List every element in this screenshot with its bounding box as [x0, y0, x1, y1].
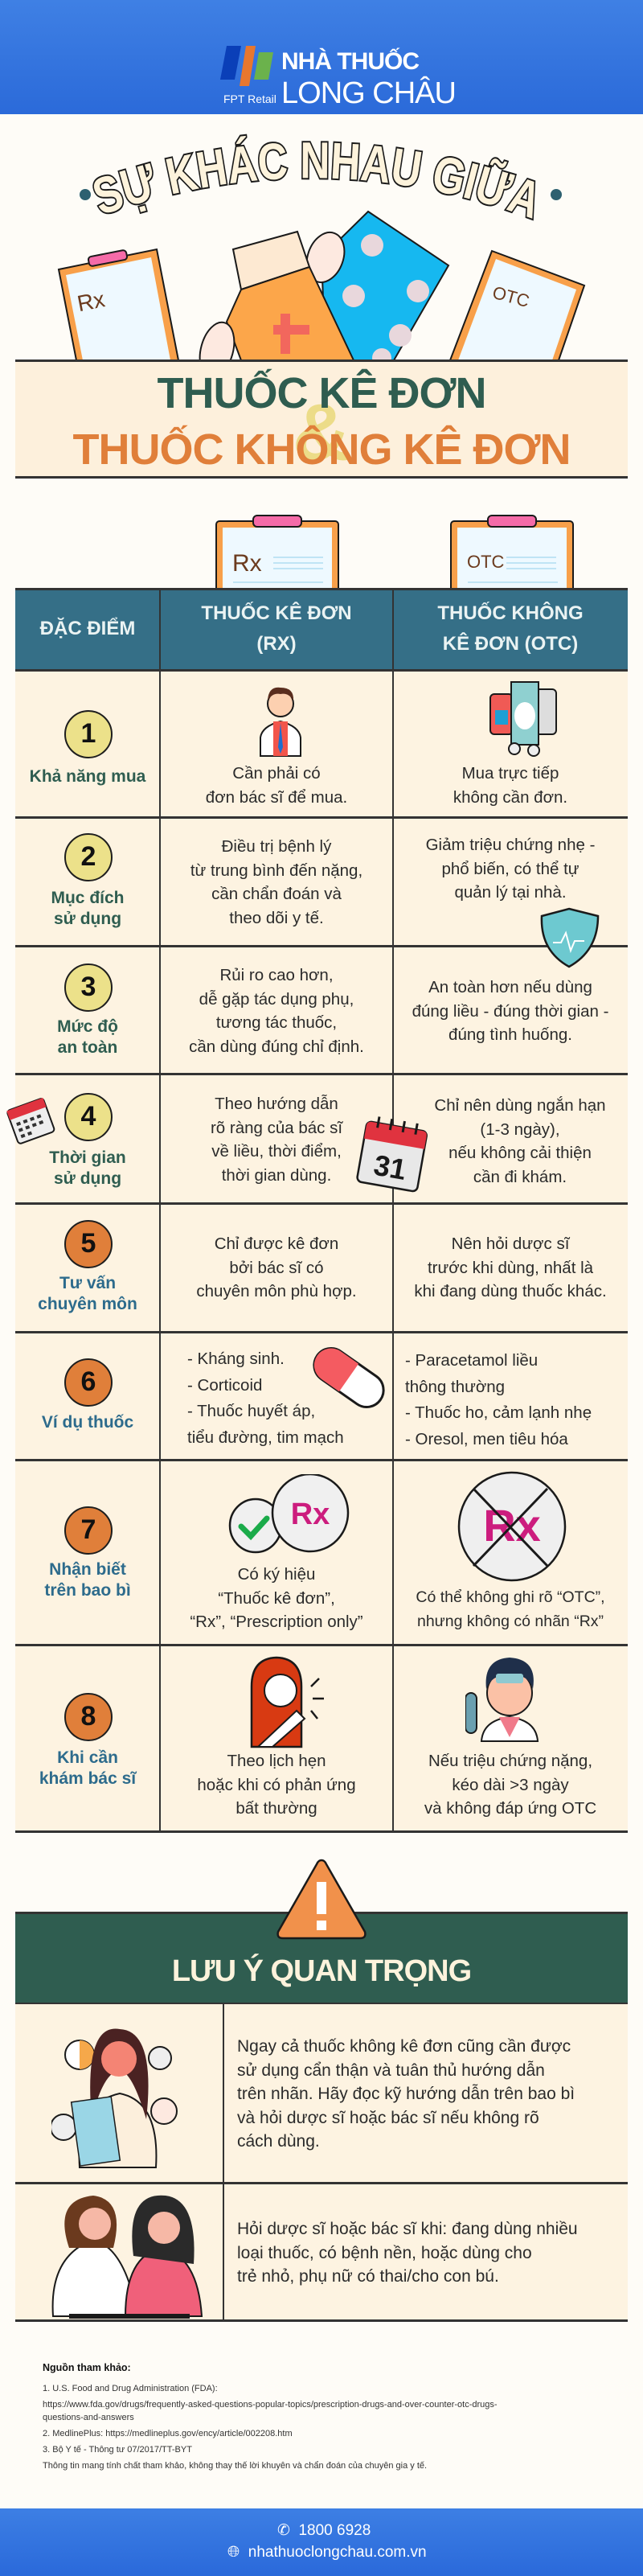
icon: capsule [313, 1347, 385, 1408]
row 4: thời gian dùng. [222, 1166, 331, 1184]
icon: coughing person [251, 1657, 324, 1748]
row 6: 6 [81, 1366, 96, 1397]
row 4: rõ ràng của bác sĩ [211, 1118, 342, 1137]
illustration: meds and clipboards [58, 211, 585, 359]
icon: pharmacist [51, 2028, 178, 2168]
row 3: Rủi ro cao hơn, [219, 966, 334, 984]
row 2: 2 [81, 841, 96, 872]
references: Nguồn tham khảo: [43, 2362, 131, 2373]
table header: THUỐC KHÔNG [437, 602, 584, 624]
row 7 [44, 1472, 605, 1631]
logo: LONG CHÂU [281, 76, 456, 110]
note 1: Ngay cả thuốc không kê đơn cũng cần được [237, 2037, 571, 2056]
references: questions-and-answers [43, 2413, 134, 2422]
heading: LƯU Ý QUAN TRỌNG [172, 1954, 471, 1988]
references: https://www.fda.gov/drugs/frequently-asked-questions-popular-topics/prescription-drugs-and-over-counter-otc-drugs- [43, 2400, 498, 2410]
row 6: - Oresol, men tiêu hóa [405, 1430, 568, 1448]
icon: clipboards above table: OTC [467, 552, 505, 572]
row 1: Mua trực tiếp [462, 764, 559, 783]
row 5: Nên hỏi dược sĩ [452, 1235, 569, 1253]
row 3: cần dùng đúng chỉ định. [189, 1037, 364, 1055]
icon: warning triangle [276, 1859, 367, 1940]
row 6: - Paracetamol liều [405, 1351, 538, 1370]
icon: shield [540, 907, 600, 968]
row 3: dễ gặp tác dụng phụ, [199, 989, 354, 1009]
row 4: Theo hướng dẫn [215, 1095, 338, 1113]
note 2: trẻ nhỏ, phụ nữ có thai/cho con bú. [237, 2267, 499, 2286]
references: 2. MedlinePlus: https://medlineplus.gov/ency/article/002208.htm [43, 2429, 293, 2438]
row 3: Mức độ [57, 1017, 118, 1036]
row 3 [57, 963, 608, 1057]
table header: ĐẶC ĐIỂM [40, 618, 135, 639]
row 5: Tư vấn [59, 1274, 116, 1292]
row 6: - Thuốc huyết áp, [187, 1402, 315, 1420]
row 2: Mục đích [51, 889, 124, 907]
row 5: trước khi dùng, nhất là [428, 1258, 593, 1277]
main title line 2: THUỐC KHÔNG KÊ ĐƠN [72, 425, 571, 474]
illustration: meds and clipboards: OTC [490, 282, 531, 311]
row 5: chuyên môn phù hợp. [196, 1282, 357, 1300]
note 1: sử dụng cẩn thận và tuân thủ hướng dẫn [237, 2060, 545, 2080]
note 2: Hỏi dược sĩ hoặc bác sĩ khi: đang dùng nhiều [237, 2220, 578, 2238]
row 2: Điều trị bệnh lý [222, 837, 331, 856]
row 2: cần chẩn đoán và [211, 885, 342, 903]
icon: clipboards above table [215, 515, 574, 588]
icon: medicine bottles [489, 681, 557, 757]
note 2 [237, 2220, 578, 2286]
row 7: trên bao bì [44, 1581, 131, 1600]
row 3: an toàn [58, 1038, 117, 1057]
row 8: kéo dài >3 ngày [452, 1776, 569, 1793]
note 1: cách dùng. [237, 2132, 320, 2151]
row 6: - Thuốc ho, cảm lạnh nhẹ [405, 1403, 592, 1422]
row 2: sử dụng [54, 910, 121, 928]
row 1: 1 [81, 718, 96, 749]
important notes panel [15, 1912, 628, 2322]
icon: check and Rx seals [228, 1474, 349, 1554]
row 3: tương tác thuốc, [216, 1013, 337, 1032]
row 7: “Rx”, “Prescription only” [190, 1613, 363, 1631]
main title line 1: THUỐC KÊ ĐƠN [157, 369, 486, 417]
icon: clipboards above table: Rx [232, 550, 262, 577]
references [43, 2362, 498, 2471]
logo: NHÀ THUỐC [281, 48, 419, 75]
row 4: 4 [81, 1101, 96, 1132]
row 5: 5 [81, 1228, 96, 1259]
title banner: & [293, 388, 350, 478]
icon: check and Rx seals: Rx [291, 1498, 330, 1531]
row 8: Theo lịch hẹn [227, 1752, 326, 1770]
row 7: Có thể không ghi rõ “OTC”, [416, 1588, 605, 1606]
row 1: không cần đơn. [453, 788, 567, 806]
row 5: chuyên môn [38, 1295, 137, 1313]
row 4: về liều, thời điểm, [211, 1142, 342, 1161]
icon: small calendar [6, 1098, 55, 1144]
row 1 [30, 681, 567, 806]
row 4 [49, 1093, 606, 1188]
row 4: (1-3 ngày), [480, 1120, 560, 1139]
table header: (RX) [256, 633, 297, 655]
row 2: theo dõi y tế. [229, 909, 324, 926]
icon: crossed Rx: Rx [483, 1500, 541, 1551]
row 3: đúng liều - đúng thời gian - [412, 1002, 608, 1020]
row 4: nếu không cải thiện [448, 1144, 592, 1162]
note 1 [237, 2037, 575, 2151]
row 8: khám bác sĩ [39, 1769, 136, 1788]
icon: calendar 31: 31 [371, 1148, 409, 1186]
row 7: “Thuốc kê đơn”, [218, 1589, 335, 1607]
row 5: Chỉ được kê đơn [215, 1235, 338, 1253]
row 5: bởi bác sĩ có [229, 1258, 324, 1277]
row 6: - Kháng sinh. [187, 1350, 285, 1368]
phone: ✆ 1800 6928 [277, 2522, 371, 2539]
row 7: nhưng không có nhãn “Rx” [417, 1612, 604, 1629]
icon: calendar 31 [356, 1116, 428, 1192]
note 2: loại thuốc, có bệnh nền, hoặc dùng cho [237, 2244, 532, 2262]
row 8: bất thường [235, 1799, 317, 1818]
row 4: sử dụng [54, 1169, 121, 1188]
references: 3. Bộ Y tế - Thông tư 07/2017/TT-BYT [43, 2445, 192, 2455]
icon: crossed Rx [458, 1472, 566, 1581]
row 4: Chỉ nên dùng ngắn hạn [434, 1096, 606, 1115]
title arc: SỰ KHÁC NHAU GIỮA [92, 134, 535, 220]
logo: FPT Retail [223, 92, 276, 105]
row 3: An toàn hơn nếu dùng [428, 978, 592, 996]
row 2: quản lý tại nhà. [454, 883, 567, 902]
row 4: Thời gian [49, 1148, 126, 1167]
row 7: 7 [81, 1514, 96, 1545]
table header: KÊ ĐƠN (OTC) [443, 633, 578, 655]
row 8: và không đáp ứng OTC [424, 1799, 596, 1818]
row 3: đúng tình huống. [448, 1025, 572, 1044]
website: 🌐︎ nhathuoclongchau.com.vn [227, 2544, 427, 2561]
row 1: Khả năng mua [30, 767, 145, 786]
header banner [0, 0, 643, 114]
row 6: tiểu đường, tim mạch [187, 1428, 344, 1446]
footer [0, 2508, 643, 2576]
row 6: thông thường [405, 1377, 505, 1396]
comparison table [15, 590, 628, 1830]
row 1: đơn bác sĩ để mua. [206, 788, 347, 806]
title banner [15, 359, 628, 479]
row 6: - Corticoid [187, 1375, 262, 1395]
row 8 [39, 1657, 596, 1818]
row 8: Khi cần [57, 1748, 118, 1767]
row 3: 3 [81, 972, 96, 1002]
row 2: phổ biến, có thể tự [441, 859, 579, 878]
note 1: và hỏi dược sĩ hoặc bác sĩ nếu không rõ [237, 2109, 539, 2126]
row 2: Giảm triệu chứng nhẹ - [426, 836, 595, 854]
note 1: trên nhãn. Hãy đọc kỹ hướng dẫn trên bao bì [237, 2085, 575, 2103]
row 4: cần đi khám. [473, 1168, 567, 1185]
references: Thông tin mang tính chất tham khảo, không thay thế lời khuyên và chẩn đoán của chuyên gia y tế. [43, 2461, 427, 2471]
row 6: Ví dụ thuốc [42, 1413, 133, 1432]
row 5 [38, 1220, 607, 1313]
row 7: Có ký hiệu [238, 1565, 315, 1584]
table header [40, 602, 584, 655]
references: 1. U.S. Food and Drug Administration (FDA): [43, 2384, 218, 2393]
row 6 [42, 1350, 592, 1448]
row 8: hoặc khi có phản ứng [197, 1776, 356, 1793]
logo [220, 46, 456, 110]
row 8: 8 [81, 1701, 96, 1732]
row 8: Nếu triệu chứng nặng, [428, 1752, 592, 1770]
icon: feverish person [465, 1658, 539, 1742]
row 1: Cần phải có [232, 764, 321, 783]
icon: doctor [260, 687, 301, 757]
illustration: meds and clipboards: Rx [75, 286, 107, 316]
row 5: khi đang dùng thuốc khác. [414, 1282, 607, 1300]
icon: doctor with patient [51, 2196, 203, 2319]
row 7: Nhận biết [49, 1560, 126, 1579]
row 2: từ trung bình đến nặng, [190, 861, 362, 880]
row 2 [51, 833, 595, 928]
table header: THUỐC KÊ ĐƠN [201, 602, 352, 624]
